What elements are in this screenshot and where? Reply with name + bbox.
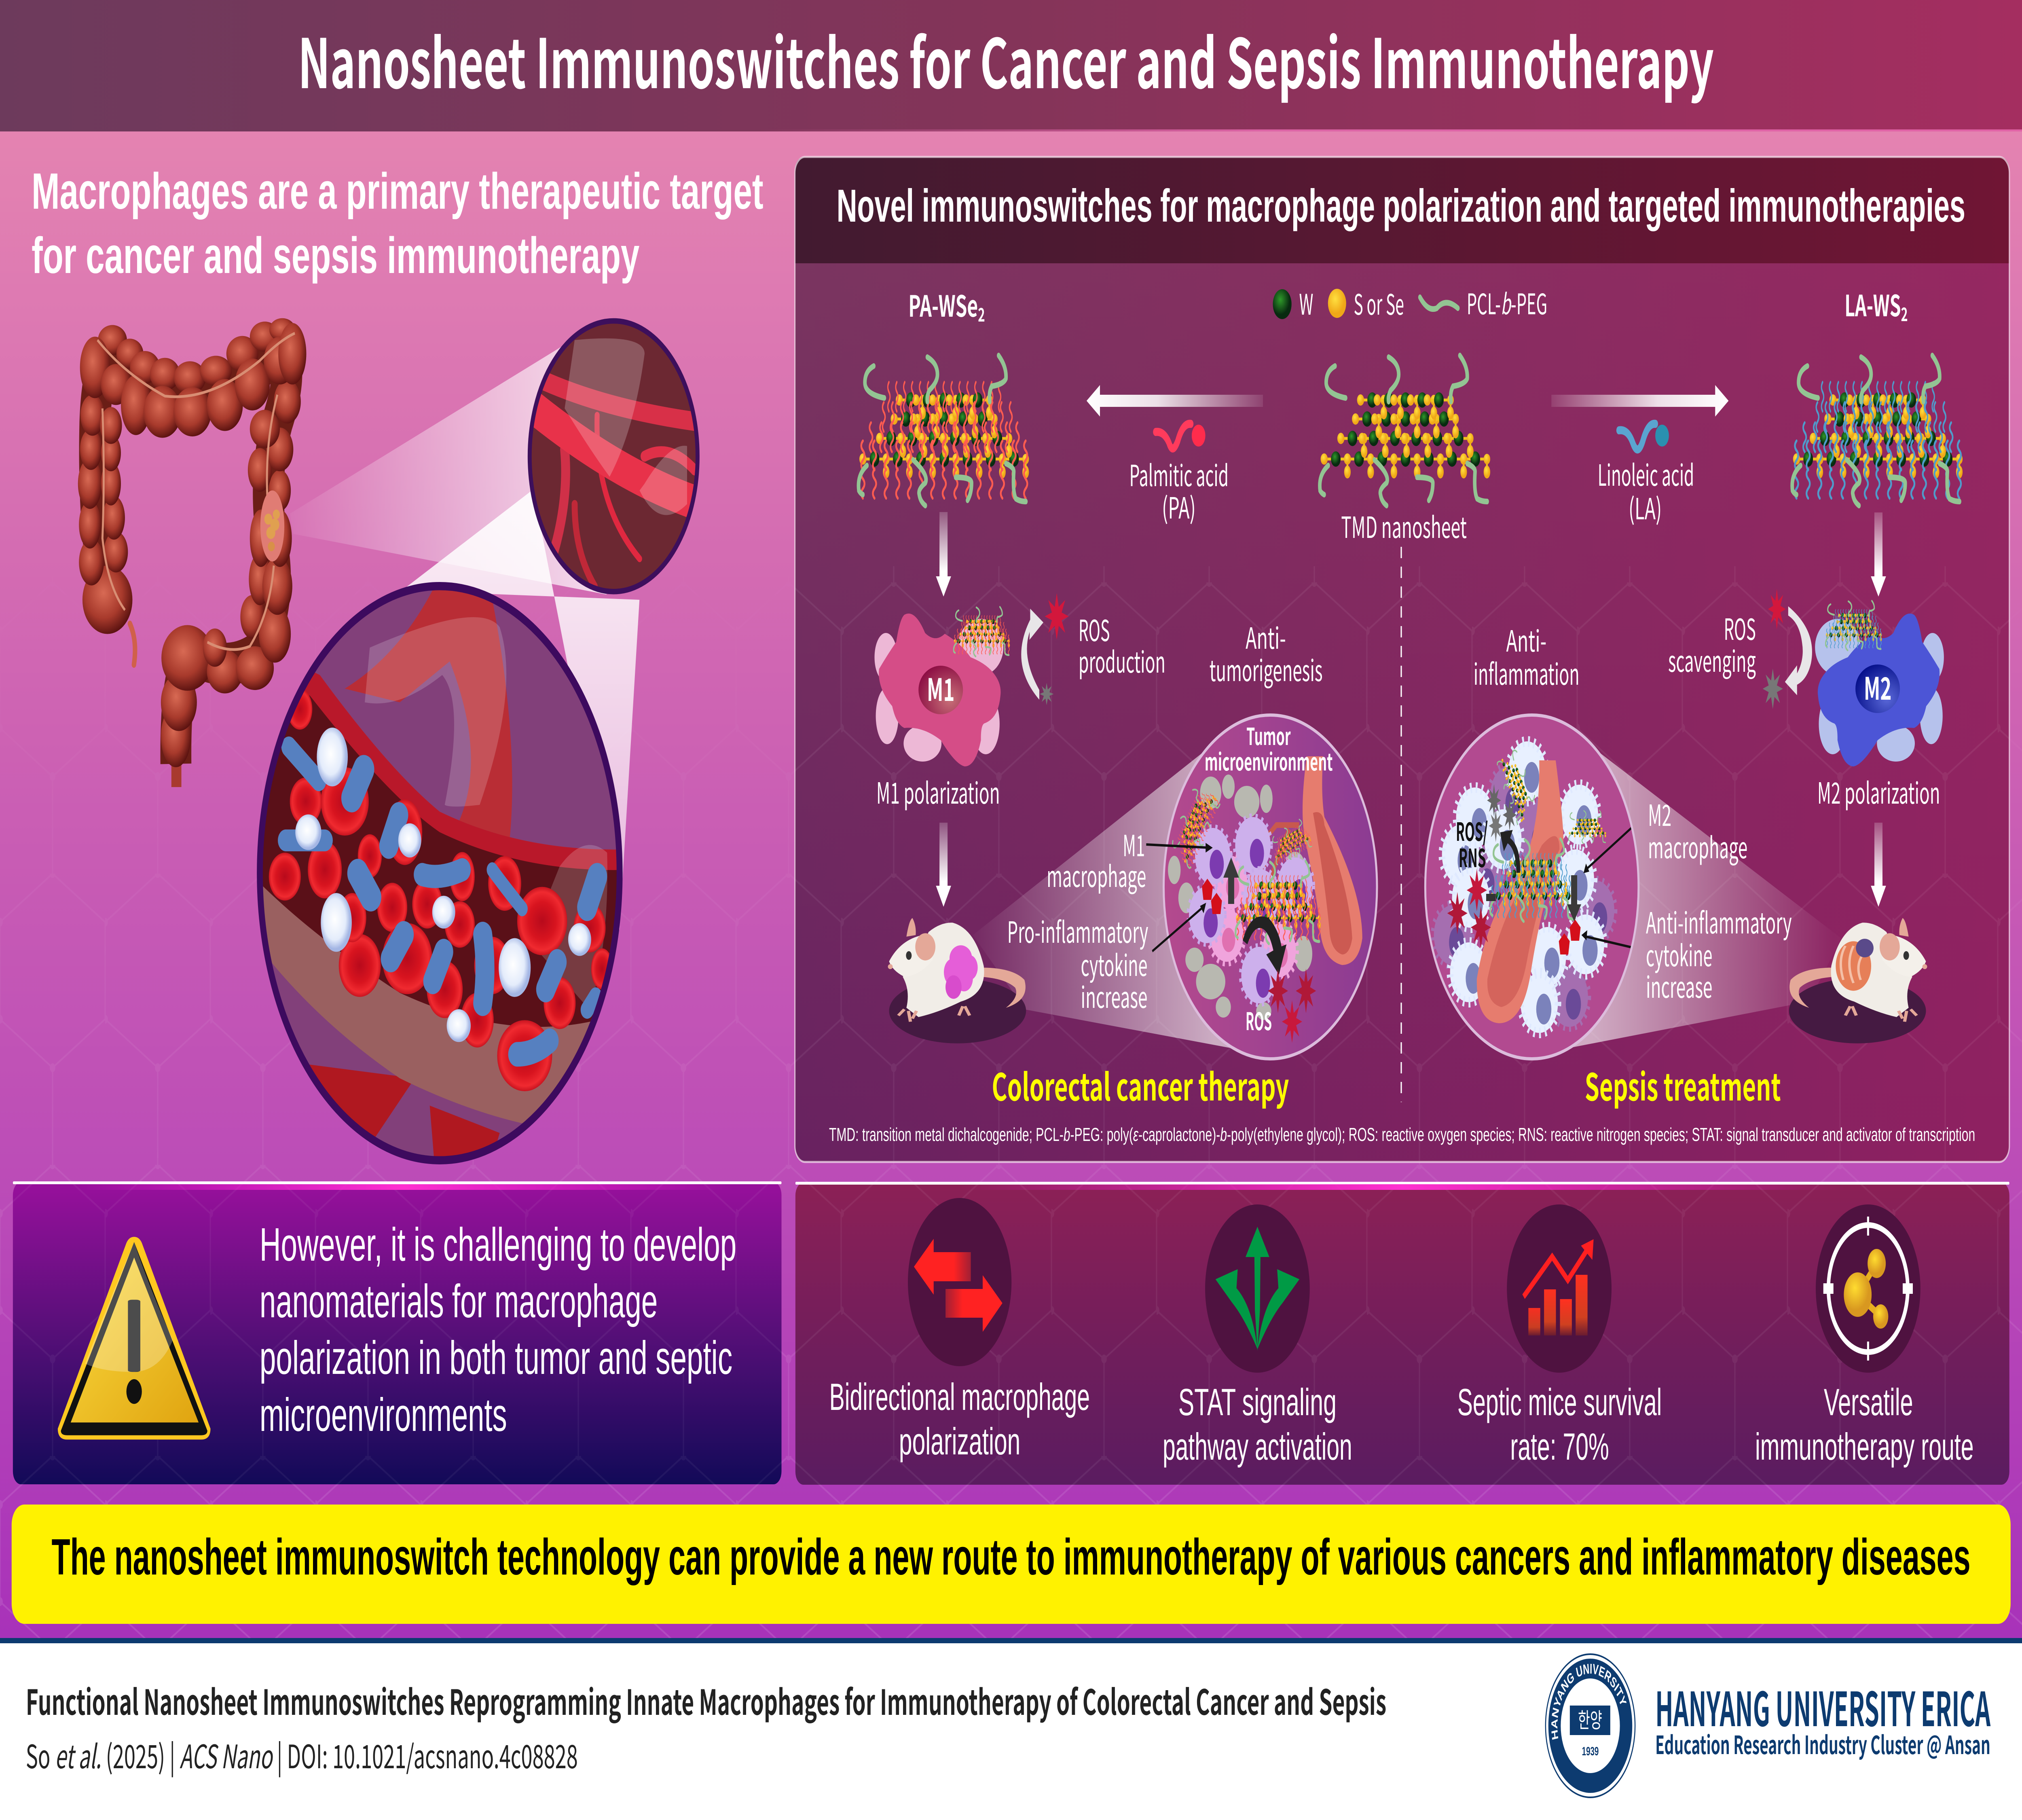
label: palmitic acid: (PA) xyxy=(1162,485,1196,527)
M1 macrophage cell: M1 xyxy=(927,665,955,710)
legend: S or Se xyxy=(1354,281,1404,323)
label: ROS production: ROS xyxy=(1079,607,1110,650)
icon: versatile route target xyxy=(1816,1204,1920,1373)
label: anti-inflammation: inflammation xyxy=(1474,651,1580,694)
label: palmitic acid xyxy=(1129,453,1229,527)
label: tumor microenvironment: Tumor xyxy=(1246,718,1291,752)
label: anti-tumorigenesis: Anti- xyxy=(1246,615,1286,658)
text: septic mice survival rate: Septic mice survival xyxy=(1457,1381,1662,1423)
illustration: magnified blood vessel with cells xyxy=(250,583,630,1167)
tumor microenvironment circle xyxy=(1146,715,1377,1059)
label: pro-inflammatory cytokine increase: increase xyxy=(1081,974,1148,1017)
label: tumor microenvironment xyxy=(1205,718,1333,777)
title bar xyxy=(0,0,2022,131)
label: TMD nanosheet: TMD nanosheet xyxy=(1341,504,1467,547)
text: versatile immunotherapy route: immunotherapy route xyxy=(1755,1425,1974,1468)
label: linoleic acid: (LA) xyxy=(1629,486,1662,528)
heading: sepsis treatment: Sepsis treatment xyxy=(1585,1058,1781,1112)
label: ROS/RNS: ROS/ xyxy=(1456,812,1488,848)
label: anti-inflammatory cytokine increase: increase xyxy=(1646,964,1712,1007)
arrow: TMD to PA-WSe2 xyxy=(1087,385,1263,417)
citation reference: So et al. (2025) | ACS Nano | DOI: 10.1021/acsnano.4c08828 xyxy=(26,1731,578,1778)
label: PA-WSe2: 2 xyxy=(978,301,985,327)
text: STAT signaling pathway activation: STAT signaling xyxy=(1178,1381,1337,1423)
citation title: Functional Nanosheet Immunoswitches Reprogramming Innate Macrophages for Immunotherapy of Colorectal Cancer and Sepsis xyxy=(26,1674,1386,1725)
label: ROS/RNS xyxy=(1456,812,1488,874)
light beam: colon to small circle xyxy=(290,344,607,595)
label: tumor microenvironment: microenvironment xyxy=(1205,743,1333,777)
label: pro-inflammatory cytokine increase: cytokine xyxy=(1081,942,1148,985)
arrow: TMD to LA-WS2 xyxy=(1551,385,1728,417)
label: ROS scavenging: scavenging xyxy=(1668,638,1756,681)
text: bidirectional macrophage polarization: polarization xyxy=(899,1420,1020,1462)
challenge text: nanomaterials for macrophage xyxy=(260,1275,658,1327)
logo: Hanyang University seal: HANYANG UNIVERSITY xyxy=(1550,1661,1628,1741)
illustration: colon xyxy=(78,318,306,787)
mouse with sepsis organs xyxy=(1789,918,1927,1043)
icon: palmitic acid xyxy=(1156,424,1206,449)
label: M2 macrophage xyxy=(1648,792,1747,867)
sepsis microenvironment circle xyxy=(1425,715,1645,1059)
title text: Nanosheet Immunoswitches for Cancer and Sepsis Immunotherapy xyxy=(298,10,1714,108)
label: ROS production: production xyxy=(1079,639,1165,681)
nanosheet: TMD xyxy=(1320,356,1490,506)
left panel heading: Macrophages are a primary therapeutic target xyxy=(32,163,764,220)
logo: Hanyang University seal: 한양 xyxy=(1578,1704,1602,1734)
icon: bidirectional arrows xyxy=(908,1198,1011,1366)
icon: STAT signalling arrows xyxy=(1205,1204,1310,1373)
M2 macrophage cell: M2 xyxy=(1864,664,1891,709)
label: ROS in tumor: ROS xyxy=(1246,1003,1272,1037)
icon: survival chart xyxy=(1507,1204,1612,1373)
label: M1 polarization: M1 polarization xyxy=(876,770,1000,813)
label: M2 macrophage: M2 xyxy=(1648,792,1671,835)
text: STAT signaling pathway activation: pathway activation xyxy=(1163,1425,1352,1468)
label: anti-inflammation xyxy=(1474,618,1580,694)
label: linoleic acid xyxy=(1598,452,1694,528)
arrow: M1 to mouse xyxy=(936,823,951,907)
yellow conclusion banner xyxy=(12,1505,2011,1624)
arrow: LA-WS2 to M2 xyxy=(1871,512,1886,597)
label: anti-inflammatory cytokine increase: cytokine xyxy=(1646,933,1712,975)
label: palmitic acid: Palmitic acid xyxy=(1129,453,1229,495)
label: ROS/RNS: RNS xyxy=(1459,838,1486,874)
text: septic mice survival rate xyxy=(1457,1381,1662,1468)
legend xyxy=(1273,281,1547,323)
label: linoleic acid: Linoleic acid xyxy=(1598,452,1694,495)
label: ROS scavenging xyxy=(1668,606,1756,681)
ROS production cycle xyxy=(1021,593,1069,705)
legend: PCL-b-PEG xyxy=(1467,281,1547,322)
challenge text: polarization in both tumor and septic xyxy=(260,1332,732,1384)
logo: Hanyang University seal xyxy=(1546,1654,1635,1797)
icon: warning triangle xyxy=(58,1237,210,1439)
panel title: Novel immunoswitches for macrophage polarization and targeted immunotherapies xyxy=(837,180,1965,232)
label: LA-WS2: LA-WS xyxy=(1844,283,1901,325)
ROS scavenging cycle xyxy=(1763,589,1812,709)
icon: linoleic acid xyxy=(1619,424,1669,449)
left panel heading xyxy=(32,163,764,284)
label: anti-inflammatory cytokine increase xyxy=(1646,900,1792,1007)
label: M1 macrophage xyxy=(1047,823,1146,896)
arrow: M2 to mouse xyxy=(1871,823,1886,907)
mouse with colorectal tumor xyxy=(888,918,1026,1043)
panel: challenge warning xyxy=(13,1181,781,1484)
logo: Hanyang University seal: 1939 xyxy=(1582,1745,1599,1758)
panel header xyxy=(795,157,2009,263)
text: versatile immunotherapy route xyxy=(1755,1381,1974,1468)
challenge text xyxy=(260,1219,736,1441)
label: anti-tumorigenesis: tumorigenesis xyxy=(1210,648,1323,690)
yellow conclusion banner: The nanosheet immunoswitch technology can provide a new route to immunotherapy of various cancers and inflammatory diseases xyxy=(52,1529,1971,1585)
panel: novel immunoswitches xyxy=(795,157,2009,1162)
zoom beam: mouse to sepsis microenvironment xyxy=(1569,753,1841,1048)
colon tumour xyxy=(260,491,284,561)
label: M1 macrophage: macrophage xyxy=(1047,853,1146,896)
label: anti-tumorigenesis xyxy=(1210,615,1323,690)
challenge text: However, it is challenging to develop xyxy=(260,1219,736,1271)
legend: W xyxy=(1299,281,1313,323)
light beam: small circle to large circle xyxy=(402,489,639,930)
text: versatile immunotherapy route: Versatile xyxy=(1824,1381,1913,1423)
text: septic mice survival rate: rate: 70% xyxy=(1510,1425,1609,1468)
nanosheet: LA-WS2 xyxy=(1792,356,1963,506)
label: PA-WSe2: PA-WSe xyxy=(908,283,976,326)
illustration: magnified small circle blood vessels xyxy=(530,321,700,592)
M1 macrophage cell xyxy=(874,607,1010,766)
label: anti-inflammatory cytokine increase: Anti-inflammatory xyxy=(1646,900,1792,942)
footer band xyxy=(0,1638,2022,1820)
label: anti-inflammation: Anti- xyxy=(1506,618,1546,660)
logo: Hanyang University ERICA wordmark xyxy=(1655,1672,1990,1762)
label: ROS scavenging: ROS xyxy=(1724,606,1756,649)
footnote abbreviations: TMD: transition metal dichalcogenide; PCL- b-PEG: poly( ε-caprolactone)- b-poly(ethylene glycol); ROS: reactive oxygen species; RNS: reactive nitrogen species; STAT: signal transducer and activator of transcription xyxy=(829,1124,1975,1145)
arrow: PA-WSe2 to M1 xyxy=(936,512,951,597)
label: pro-inflammatory cytokine increase xyxy=(1007,909,1148,1017)
label: M2 macrophage: macrophage xyxy=(1648,825,1747,867)
challenge text: microenvironments xyxy=(260,1389,507,1441)
nanosheet: PA-WSe2 xyxy=(859,356,1029,506)
heading: colorectal cancer therapy: Colorectal cancer therapy xyxy=(992,1058,1289,1112)
label: ROS production xyxy=(1079,607,1165,681)
M2 macrophage cell xyxy=(1815,601,1944,766)
text: STAT signaling pathway activation xyxy=(1163,1381,1352,1468)
panel: key outcomes xyxy=(795,1182,2009,1485)
text: bidirectional macrophage polarization xyxy=(829,1376,1090,1462)
label: LA-WS2: 2 xyxy=(1901,300,1908,327)
logo: Hanyang University ERICA wordmark: Education Research Industry Cluster @ Ansan xyxy=(1655,1725,1990,1762)
logo: Hanyang University ERICA wordmark: HANYANG UNIVERSITY ERICA xyxy=(1655,1672,1990,1740)
label: M1 macrophage: M1 xyxy=(1123,823,1145,865)
text: bidirectional macrophage polarization: Bidirectional macrophage xyxy=(829,1376,1090,1418)
label: pro-inflammatory cytokine increase: Pro-inflammatory xyxy=(1007,909,1148,952)
zoom beam: mouse to tumor microenvironment xyxy=(973,753,1239,1050)
left panel heading: for cancer and sepsis immunotherapy xyxy=(32,227,639,284)
label: M2 polarization: M2 polarization xyxy=(1817,770,1940,813)
